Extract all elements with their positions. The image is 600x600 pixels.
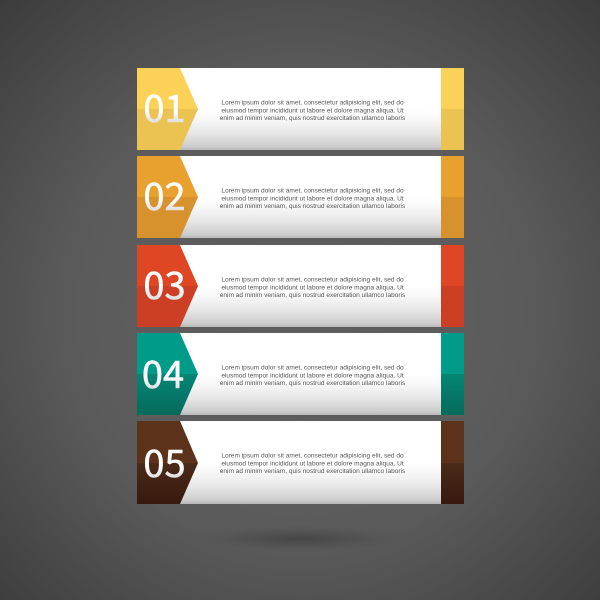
text block 04: enim ad minim veniam, quis nostrud exercitation ullamco laboris [220,380,406,387]
text block 05: enim ad minim veniam, quis nostrud exercitation ullamco laboris [220,468,406,475]
side tab 03 [441,245,464,327]
text block 02: Lorem ipsum dolor sit amet, consectetur adipisicing elit, sed do [221,188,404,194]
white card 03 [170,245,442,327]
number 01: 01 [143,78,186,133]
side tab 04 [441,333,464,415]
chevron 05 [137,421,198,504]
text block 03: Lorem ipsum dolor sit amet, consectetur adipisicing elit, sed do [221,276,404,284]
side tab 01 [441,68,464,150]
side tab 05 [441,421,464,504]
band under card 04 [137,415,464,420]
band under card 01 [137,150,464,155]
text block 05: Lorem ipsum dolor sit amet, consectetur adipisicing elit, sed do [221,452,404,460]
white card 04 [170,333,442,415]
side tab 02 [441,156,464,238]
panel: step 04 [137,333,464,420]
text block 01: eiusmod tempor incididunt ut labore et dolore magna aliqua. Ut [221,107,404,114]
band under card 03 [137,327,464,332]
number 05: 05 [143,433,186,488]
chevron 02 [137,156,198,238]
text block 02: eiusmod tempor incididunt ut labore et dolore magna aliqua. Ut [221,195,404,202]
number 03: 03 [143,255,186,310]
text block 01: enim ad minim veniam, quis nostrud exercitation ullamco laboris [220,115,406,122]
text block 04: eiusmod tempor incididunt ut labore et dolore magna aliqua. Ut [221,372,404,379]
band under card 02 [137,238,464,244]
text block 04: Lorem ipsum dolor sit amet, consectetur adipisicing elit, sed do [221,364,404,372]
white card 01 [170,68,442,150]
number 04: 04 [142,344,184,399]
text block 03: enim ad minim veniam, quis nostrud exercitation ullamco laboris [220,292,406,299]
text block 03: eiusmod tempor incididunt ut labore et dolore magna aliqua. Ut [221,284,404,291]
chevron 04 [137,333,198,415]
text block 02: enim ad minim veniam, quis nostrud exercitation ullamco laboris [220,203,406,210]
floor shadow [182,525,418,553]
number 02: 02 [143,166,186,221]
text block 05: eiusmod tempor incididunt ut labore et dolore magna aliqua. Ut [221,460,404,467]
white card 02 [170,156,442,238]
white card 05 [170,421,442,504]
chevron 03 [137,245,198,327]
panel: step 01 [137,68,464,155]
panel: step 03 [137,245,464,332]
panel: step 05 [137,421,464,504]
text block 01: Lorem ipsum dolor sit amet, consectetur adipisicing elit, sed do [221,100,404,106]
panel: step 02 [137,156,464,244]
chevron 01 [137,68,198,150]
